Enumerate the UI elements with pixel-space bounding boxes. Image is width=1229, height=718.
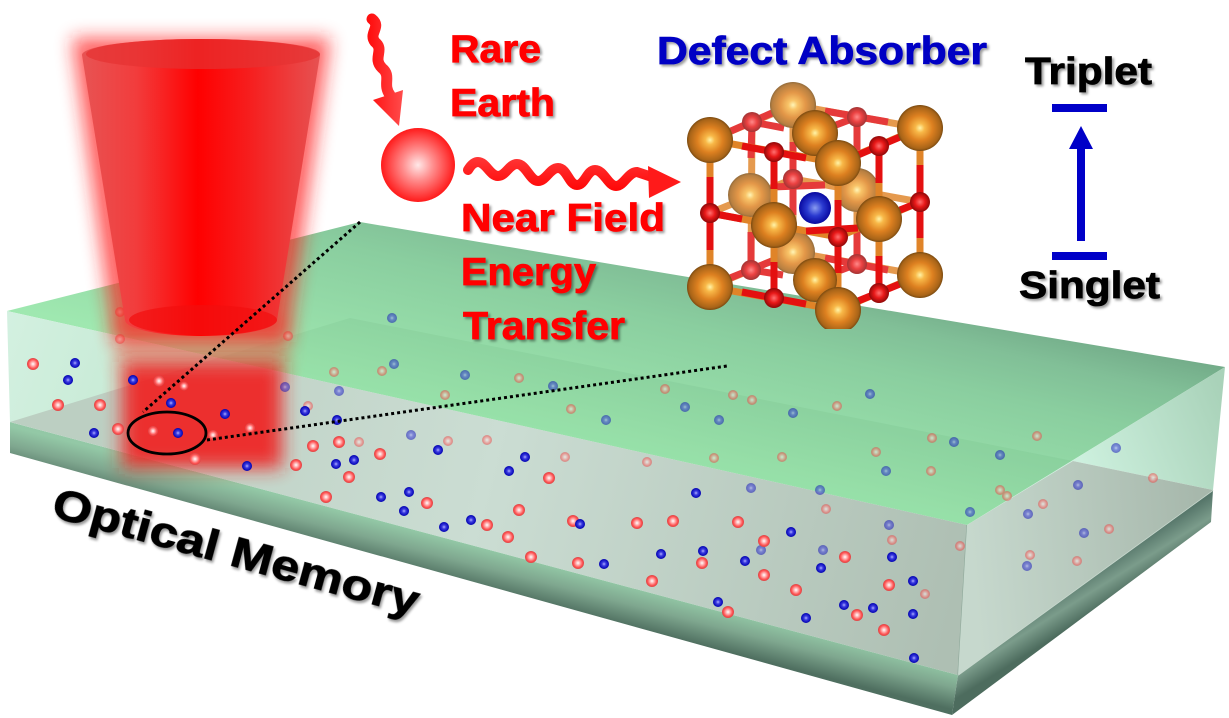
- label: Singlet: Singlet: [1019, 265, 1160, 307]
- zoom dotted lines: [143, 222, 727, 440]
- energy diagram: [1019, 51, 1160, 307]
- back atoms and bonds: [710, 82, 920, 287]
- label: Rare Earth: [450, 28, 555, 125]
- central blue defect: [799, 192, 831, 224]
- rare earth sphere: [381, 128, 455, 202]
- mid atoms: [792, 110, 838, 302]
- label: Near Field Energy Transfer: [461, 197, 665, 348]
- triplet level: [1052, 104, 1107, 112]
- label: Triplet: Triplet: [1025, 51, 1152, 93]
- front bonds: [710, 128, 920, 310]
- label: Rare Earth: Earth: [450, 82, 555, 125]
- label: Near Field Energy Transfer: Energy: [461, 251, 596, 294]
- wavy arrow: incoming light: [372, 19, 403, 126]
- laser beam: [72, 38, 330, 342]
- heading: Defect Absorber: Defect Absorber: [657, 30, 987, 73]
- red rare earth particles: [27, 358, 895, 636]
- label: Near Field Energy Transfer: Near Field: [461, 197, 665, 240]
- crystal lattice: [687, 82, 943, 333]
- blue defect particles: [63, 358, 919, 663]
- zoom ellipse: [128, 412, 206, 454]
- slab base edge: [10, 422, 1213, 715]
- label: Rare Earth: Rare: [450, 28, 541, 71]
- label: Optical Memory: Optical Memory: [47, 479, 425, 625]
- orange atoms: [687, 105, 943, 333]
- slab right face: [958, 367, 1225, 675]
- singlet level: [1052, 252, 1107, 260]
- laser spot inside slab: [116, 318, 288, 468]
- faint particles seen through slab: [115, 307, 1158, 599]
- slab front face: [7, 311, 967, 675]
- wavy arrow: energy transfer: [468, 162, 681, 198]
- label: Near Field Energy Transfer: Transfer: [463, 305, 625, 348]
- slab top face: [7, 222, 1225, 525]
- oxygen atoms: [700, 136, 930, 308]
- excitation arrow: [1069, 126, 1093, 241]
- memory slab: [7, 222, 1225, 715]
